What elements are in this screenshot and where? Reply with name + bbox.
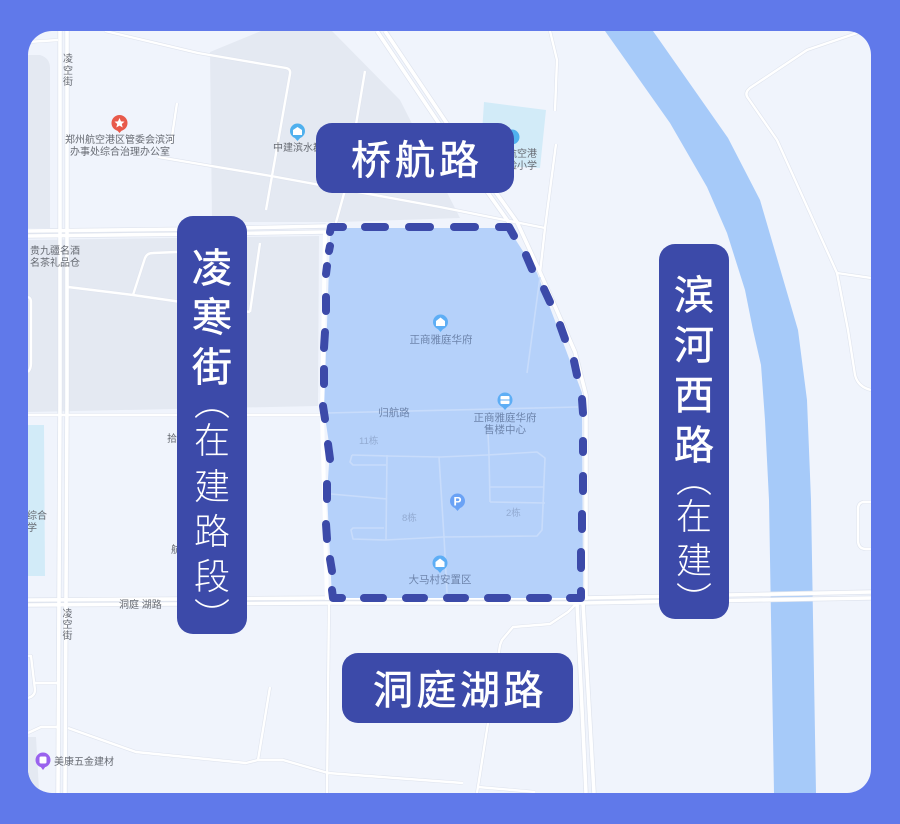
road label: 凌寒街（在建路段）: 凌 <box>192 247 232 291</box>
road label: 滨河西路（在建）: ︵ <box>676 459 712 500</box>
map place labels: 街 <box>63 75 73 88</box>
map place labels: 实验小学 <box>497 159 537 172</box>
icon: red government pin <box>112 115 128 133</box>
map place labels: 办事处综合治理办公室 <box>70 145 170 158</box>
map place labels: 中建滨水郡 <box>273 141 323 154</box>
road label: 凌寒街（在建路段）: ︵ <box>194 382 230 423</box>
plot labels: 正商雅庭华府 <box>474 411 536 424</box>
plot labels: 归航路 <box>378 406 410 419</box>
map place labels: 名茶礼品仓 <box>30 256 80 269</box>
road label: 凌寒街（在建路段）: 寒 <box>192 296 232 340</box>
highlighted plot area <box>324 228 583 598</box>
plot labels: 2栋 <box>506 507 521 519</box>
icon: resettlement pin <box>432 556 448 573</box>
road label: 凌寒街（在建路段）: 路 <box>194 511 230 552</box>
plot labels: 11栋 <box>359 435 379 447</box>
plot labels: 大马村安置区 <box>408 573 472 586</box>
map place labels: 空 <box>62 618 72 631</box>
icon: parking pin: P <box>453 494 462 508</box>
map place labels: 凌 <box>63 52 73 65</box>
road label: 凌寒街（在建路段）: 在 <box>194 420 230 461</box>
road label: 滨河西路（在建）: 建 <box>676 540 712 581</box>
road label: 凌寒街（在建路段）: ︶ <box>194 596 230 637</box>
map place labels: 洞庭 湖路 <box>119 598 162 611</box>
road label: 滨河西路（在建） <box>659 244 729 621</box>
icon: residence pin <box>433 314 448 332</box>
road label: 滨河西路（在建）: ︶ <box>676 580 712 621</box>
plot labels: 售楼中心 <box>484 423 526 436</box>
icon: sales centre pin <box>498 392 512 410</box>
road label: 洞庭湖路: 洞庭湖路 <box>373 669 547 713</box>
inner roads <box>327 277 578 593</box>
road label: 凌寒街（在建路段） <box>177 216 247 637</box>
road label: 洞庭湖路 <box>342 653 573 723</box>
road label: 凌寒街（在建路段）: 段 <box>194 556 230 597</box>
map place labels: 贵九疆名酒 <box>30 244 80 257</box>
road label: 桥航路 <box>316 123 514 193</box>
dashed plot boundary <box>323 227 583 598</box>
road label: 滨河西路（在建）: 河 <box>674 324 714 368</box>
map place labels: 街 <box>62 629 72 642</box>
river <box>605 31 816 793</box>
road label: 滨河西路（在建）: 滨 <box>674 274 714 318</box>
map place labels: 航空港 <box>507 147 537 160</box>
map place labels: 学 <box>27 521 37 534</box>
plot labels <box>359 333 536 586</box>
road label: 滨河西路（在建）: 在 <box>676 496 712 537</box>
icon: parking pin <box>450 494 465 511</box>
road label: 滨河西路（在建）: 路 <box>674 424 714 468</box>
map place labels: 空 <box>63 64 73 77</box>
plot labels: 正商雅庭华府 <box>410 333 472 346</box>
map place labels: 郑州航空港区管委会滨河 <box>65 133 175 146</box>
map place labels: 综合 <box>27 509 47 522</box>
plot labels: 8栋 <box>402 512 417 524</box>
map place labels <box>27 52 537 768</box>
map place labels: 美康五金建材 <box>54 755 114 768</box>
icon: blue building pin <box>290 124 305 141</box>
road label: 滨河西路（在建）: 西 <box>674 374 714 418</box>
school grounds <box>28 102 546 576</box>
road label: 凌寒街（在建路段）: 建 <box>194 466 230 507</box>
icon: school pin <box>511 130 520 144</box>
map place labels: 凌 <box>62 607 72 620</box>
map place labels: 航 <box>171 543 181 556</box>
icon: purple shop pin <box>36 752 50 770</box>
road label: 凌寒街（在建路段）: 街 <box>192 346 232 390</box>
road label: 桥航路: 桥航路 <box>351 139 483 183</box>
map place labels: 拾 <box>167 432 177 445</box>
gray building blocks <box>28 31 460 790</box>
